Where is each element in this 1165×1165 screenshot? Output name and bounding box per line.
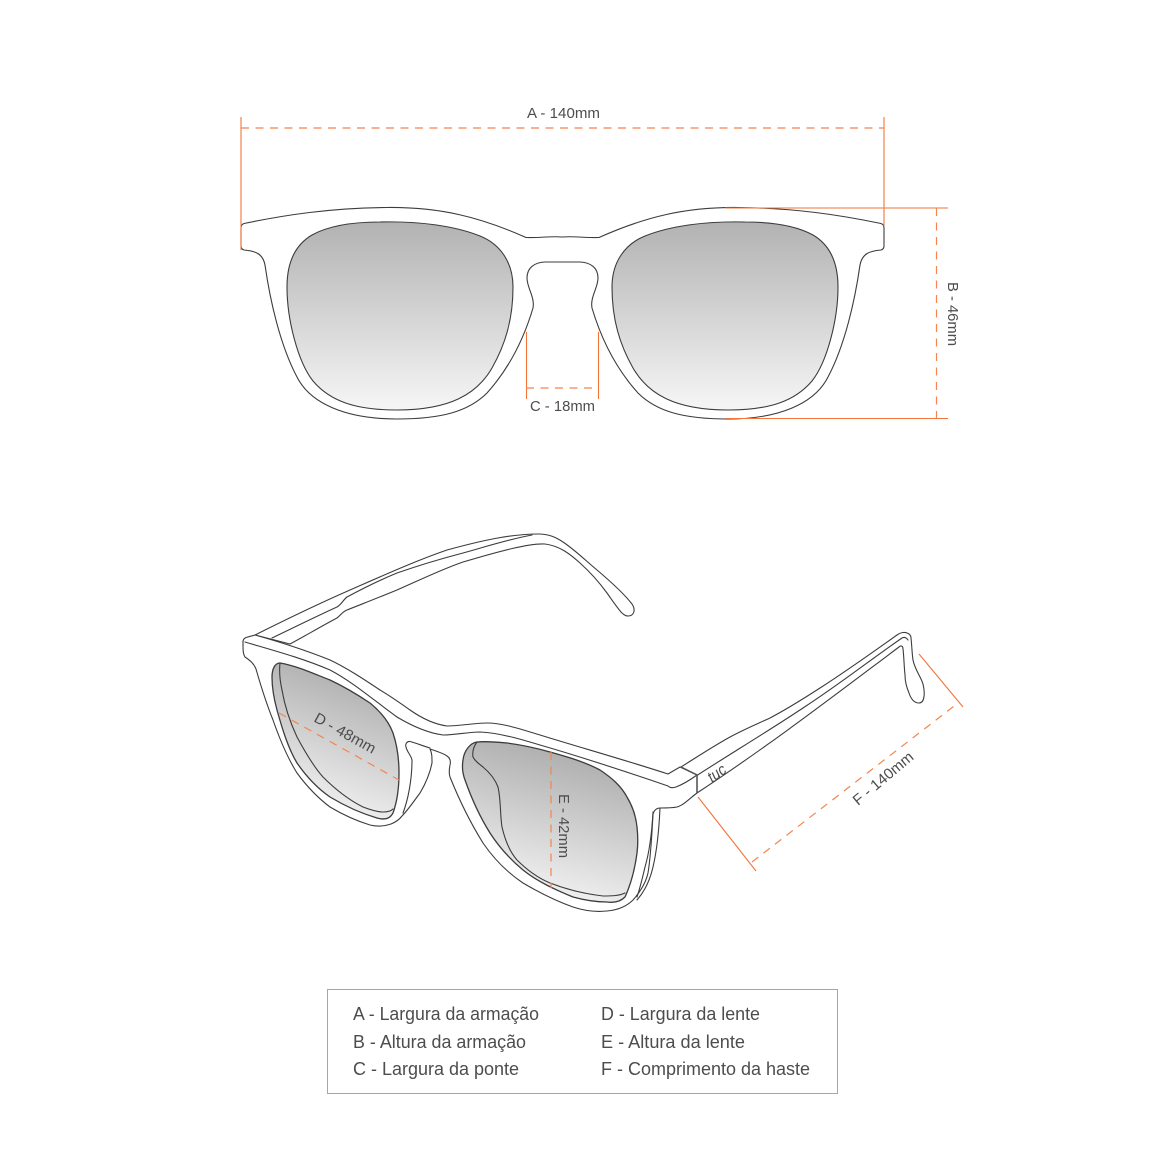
dimension D: lens width: D - 48mm [311,710,379,757]
front view of sunglasses [241,207,884,419]
brand mark: tuc [705,761,730,786]
legend column 2: F - Comprimento da haste [601,1059,810,1079]
dimension F: temple length [698,654,963,871]
legend column 2: D - Largura da lente [601,1004,760,1024]
dimension E: lens height [551,752,572,888]
far temple arm [255,534,634,644]
dimension E: lens height: E - 42mm [555,794,572,858]
legend column 1: A - Largura da armação [353,1004,539,1024]
dimension B: frame height [725,208,961,418]
near temple arm [681,632,924,793]
three-quarter view of sunglasses [243,534,924,911]
frame top bevel [245,642,697,788]
legend column 1 [353,1004,539,1079]
legend column 2: E - Altura da lente [601,1032,745,1052]
dimension B: frame height: B - 46mm [944,282,961,346]
dimension C: bridge width: C - 18mm [530,398,595,415]
legend column 1: C - Largura da ponte [353,1059,519,1079]
dimension C: bridge width [526,332,598,415]
legend column 2 [601,1004,810,1079]
legend box [328,990,838,1094]
right side inner rim [637,808,660,900]
temple hinge line [681,767,697,793]
left lens [272,663,399,819]
dimension A: frame width [241,105,884,250]
right half of frame and lens [562,207,884,419]
frame front [243,635,697,911]
legend column 1: B - Altura da armação [353,1032,526,1052]
near temple inner edge [696,637,908,776]
dimension A: frame width: A - 140mm [527,105,600,122]
left half of frame and lens [241,207,562,419]
right lens [462,742,638,902]
dimension F: temple length: F - 140mm [850,748,917,809]
dimension D: lens width [279,710,399,780]
bridge nose pad [403,741,430,813]
far temple inner edge [272,535,532,638]
